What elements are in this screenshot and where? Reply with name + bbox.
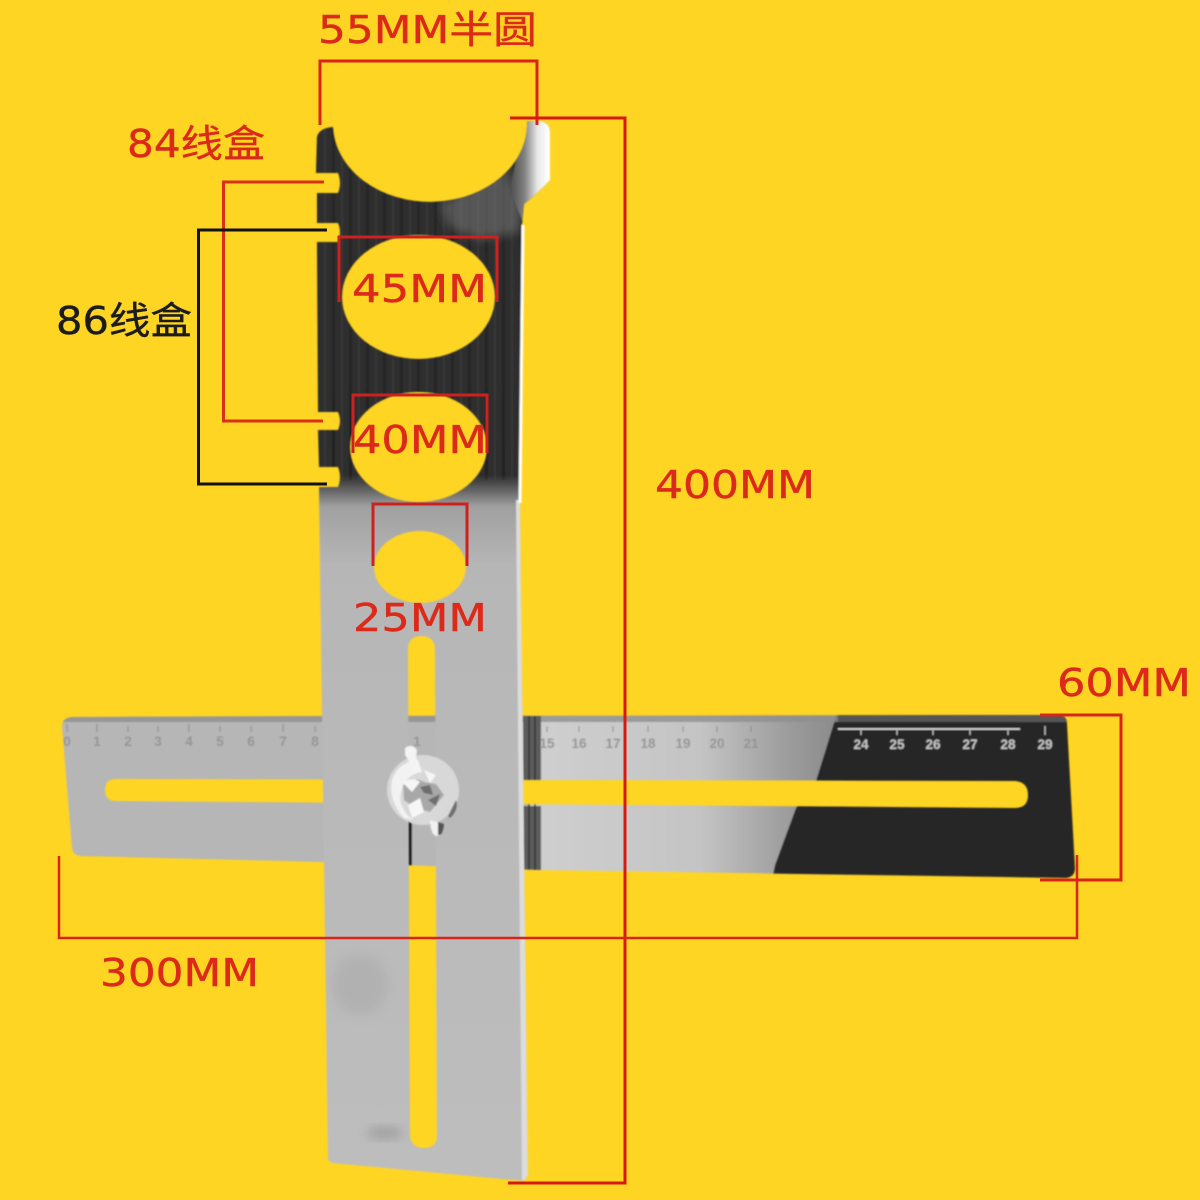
washer inner white rim [391, 760, 422, 820]
ruler body [61, 714, 1076, 879]
ruler numbers left [63, 734, 759, 751]
label: 40MM [353, 418, 487, 462]
ruler numbers left: 18 [640, 736, 656, 751]
label: 45MM [352, 267, 487, 311]
nut shading [403, 780, 444, 812]
ruler numbers left: 21 [743, 736, 759, 751]
bracket [353, 395, 487, 453]
ruler numbers left: 8 [311, 734, 319, 749]
icon: wing nut [387, 746, 459, 836]
ruler numbers left: 15 [539, 736, 555, 751]
horizontal ruler bar [61, 714, 1076, 879]
vertical bar [310, 115, 560, 1181]
dimension: 400mm length [508, 118, 815, 1183]
metal finish [310, 115, 560, 1180]
dimension: 300mm width [59, 855, 1077, 995]
bracket [373, 504, 467, 566]
bracket [198, 230, 327, 484]
bracket [508, 118, 625, 1183]
ruler numbers left: 19 [675, 736, 691, 751]
ruler numbers right: 24 [853, 737, 869, 752]
bracket [59, 855, 1077, 938]
label: 55MM半圆 [318, 8, 537, 52]
label: 25MM [353, 596, 487, 640]
nut dark marks [420, 785, 457, 818]
ruler numbers right: 26 [925, 737, 941, 752]
ruler numbers right: 29 [1037, 737, 1053, 752]
label: 84线盒 [127, 122, 265, 166]
ruler numbers left: 17 [605, 736, 621, 751]
dimension: 25mm hole [353, 504, 487, 640]
ruler numbers left: 7 [279, 734, 287, 749]
ruler numbers right: 28 [1000, 737, 1016, 752]
bracket [1040, 715, 1121, 880]
ruler numbers right: 27 [962, 737, 978, 752]
dimension: 60mm width [1040, 661, 1191, 880]
ruler numbers left: 20 [709, 736, 725, 751]
nut upper wing [405, 746, 422, 772]
bracket [320, 61, 537, 125]
vertical bar body [316, 121, 550, 1181]
dimension: 84 box [127, 122, 324, 421]
ruler ticks [67, 724, 1045, 735]
washer [387, 755, 459, 825]
bracket [339, 237, 497, 302]
bracket [224, 182, 324, 421]
label: 300MM [100, 951, 259, 995]
label: 60MM [1057, 661, 1191, 705]
ruler numbers left: 6 [247, 734, 255, 749]
ruler numbers right [853, 737, 1053, 752]
dimension: 86 box [56, 230, 327, 484]
dimension: 45mm hole [339, 237, 497, 311]
dimension: 55mm semicircle [318, 8, 537, 125]
ruler numbers left: 5 [216, 734, 224, 749]
ruler numbers left: 0 [63, 734, 71, 749]
white edge highlight [520, 225, 523, 503]
label: 400MM [655, 463, 815, 507]
ruler numbers left: 16 [571, 736, 587, 751]
nut lower wing [430, 820, 441, 836]
ruler numbers right: 25 [889, 737, 905, 752]
ruler numbers left: 1 [413, 734, 421, 749]
label: 86线盒 [56, 299, 192, 343]
dimension: 40mm hole [353, 395, 487, 462]
ruler numbers left: 4 [185, 734, 193, 749]
nut highlights [403, 770, 436, 818]
ruler numbers left: 3 [154, 734, 162, 749]
ruler numbers left: 2 [124, 734, 132, 749]
ruler numbers left: 1 [93, 734, 101, 749]
